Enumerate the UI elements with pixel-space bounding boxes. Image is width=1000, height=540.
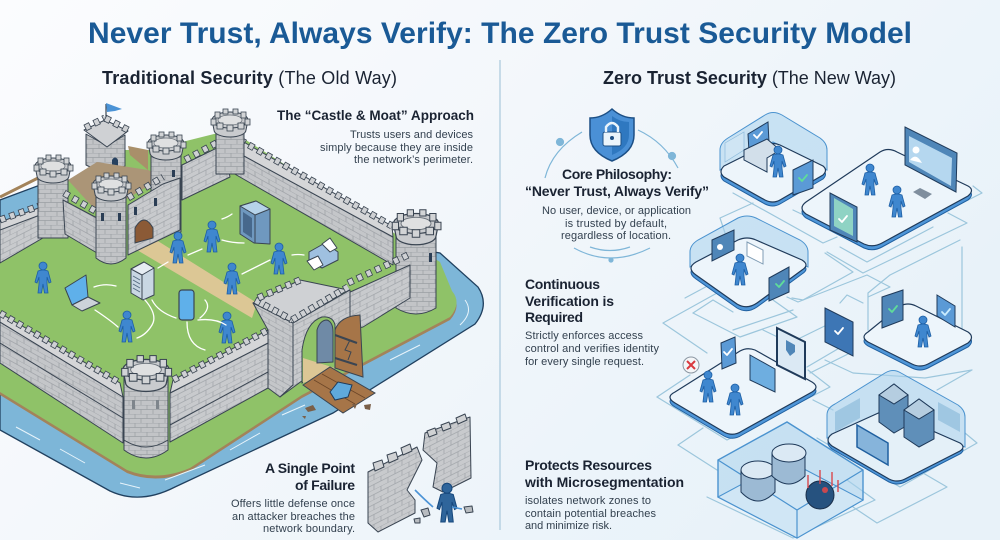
dirt path xyxy=(137,238,257,318)
text: castle and moat: the network’s perimeter. xyxy=(354,154,473,166)
back walls xyxy=(0,140,393,265)
front left wall xyxy=(0,313,123,443)
text: castle and moat xyxy=(277,108,474,166)
verified user xyxy=(727,384,743,415)
text: microsegmentation: Protects Resources xyxy=(525,457,652,473)
text: microsegmentation xyxy=(524,457,684,532)
malware virus xyxy=(806,481,834,509)
text: continuous verification: Required xyxy=(525,309,583,325)
text: single point of failure xyxy=(231,460,355,535)
text: core philosophy: regardless of location. xyxy=(561,230,671,242)
text: castle and moat: The “Castle & Moat” Approach xyxy=(277,108,474,123)
text: single point of failure: of Failure xyxy=(295,477,355,493)
text: continuous verification: control and verifies identity xyxy=(525,343,660,355)
floating verified card xyxy=(825,308,853,356)
damaged drawbridge xyxy=(302,367,375,419)
large monitor xyxy=(905,127,957,192)
text: microsegmentation: and minimize risk. xyxy=(525,520,612,532)
text: continuous verification: Strictly enforces access xyxy=(525,330,644,342)
text: castle and moat: simply because they are inside xyxy=(320,142,473,154)
login screen xyxy=(750,355,775,392)
castle and moat illustration xyxy=(0,103,483,497)
smartphone xyxy=(179,290,194,320)
orbit arcs around shield xyxy=(545,130,678,262)
text: core philosophy xyxy=(525,166,709,242)
far right tower xyxy=(211,109,250,174)
text: core philosophy: No user, device, or application xyxy=(542,205,691,217)
text: continuous verification xyxy=(525,276,660,368)
trust connection arcs xyxy=(94,214,304,350)
heading: traditional security: Traditional Security (The Old Way) xyxy=(102,68,397,88)
title: Never Trust, Always Verify: The Zero Trust Security Model xyxy=(88,17,912,50)
laptop xyxy=(65,275,100,311)
rubble xyxy=(414,506,473,523)
gatehouse building xyxy=(63,177,180,255)
text: single point of failure: Offers little defense once xyxy=(231,498,355,510)
left tower xyxy=(34,155,73,238)
desk and screen xyxy=(748,122,769,152)
data stacks xyxy=(741,464,775,501)
people inside the castle xyxy=(35,221,287,343)
text: microsegmentation: contain potential breaches xyxy=(525,508,656,520)
verified door xyxy=(830,193,857,242)
text: core philosophy: “Never Trust, Always Verify” xyxy=(525,183,709,199)
moat xyxy=(0,133,483,497)
text: continuous verification: Continuous xyxy=(525,276,600,292)
barrier gate xyxy=(857,425,888,465)
zone: identity check room xyxy=(690,216,808,311)
network connection lines xyxy=(657,186,982,538)
right front wall xyxy=(348,255,410,330)
middle tower xyxy=(147,132,186,232)
zone: reception with glass walls xyxy=(720,112,827,206)
wall list panel xyxy=(725,132,744,162)
zone: workstation platform xyxy=(802,127,972,250)
text: core philosophy: Core Philosophy: xyxy=(562,166,672,182)
zone: access request platform xyxy=(670,328,816,438)
broken wooden door xyxy=(335,315,363,377)
printer xyxy=(307,238,338,270)
keep with flag xyxy=(68,103,163,215)
breach arrow xyxy=(415,490,462,509)
center divider xyxy=(499,60,501,530)
verified door xyxy=(793,160,813,195)
phone check xyxy=(721,337,736,369)
server rack: back xyxy=(240,201,270,244)
text: microsegmentation: with Microsegmentation xyxy=(524,474,684,490)
text: single point of failure: an attacker breaches the xyxy=(232,511,355,523)
server towers xyxy=(879,384,908,433)
front tower xyxy=(122,356,172,458)
wall data panels xyxy=(835,398,960,432)
text: core philosophy: is trusted by default, xyxy=(565,218,667,230)
text: single point of failure: A Single Point xyxy=(265,460,355,476)
document panel xyxy=(777,328,805,379)
text: microsegmentation: isolates network zones to xyxy=(525,495,651,507)
text: single point of failure: network boundary. xyxy=(263,523,355,535)
heading: zero trust security: Zero Trust Security (The New Way) xyxy=(603,68,896,88)
wall fragments xyxy=(368,447,422,532)
zone: contained breach cube xyxy=(718,422,863,538)
front right wall xyxy=(170,330,268,442)
zone: user platform right xyxy=(825,290,972,370)
zone: server room xyxy=(827,370,965,484)
main gatehouse xyxy=(253,280,350,397)
text: continuous verification: for every single request. xyxy=(525,356,644,368)
shield with lock icon xyxy=(590,109,634,161)
text: continuous verification: Verification is xyxy=(525,293,614,309)
grass courtyard xyxy=(0,130,457,476)
right tower xyxy=(392,210,441,314)
text: castle and moat: Trusts users and devices xyxy=(350,129,474,141)
breached wall illustration xyxy=(368,414,473,532)
server rack: center xyxy=(131,262,154,300)
denied mark xyxy=(683,357,699,373)
denied user xyxy=(700,371,716,402)
front keep tower xyxy=(92,173,131,264)
person breaching xyxy=(437,483,457,522)
gate archway xyxy=(302,317,335,383)
